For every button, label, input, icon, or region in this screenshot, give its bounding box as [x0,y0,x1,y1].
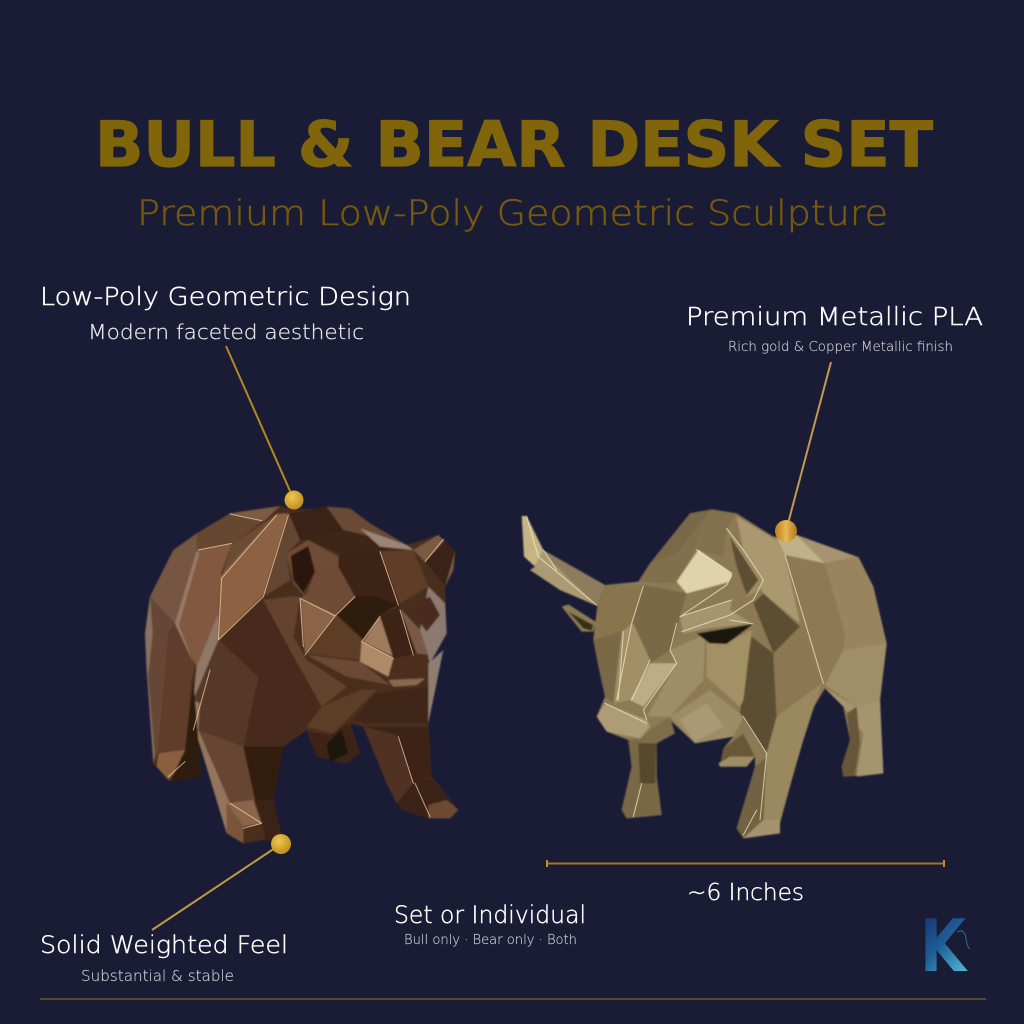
dimension bar [546,860,945,867]
subtitle: Premium Low-Poly Geometric Sculpture [137,194,888,234]
callout: solid weighted feel: Solid Weighted Feel [40,931,288,959]
logo: K [920,904,968,988]
callout: set or individual: Bull only · Bear only · Both [404,932,577,948]
callout: premium metallic PLA: Premium Metallic PLA [686,302,983,331]
callout: premium metallic PLA: Rich gold & Copper Metallic finish [728,340,953,355]
bear sculpture [145,506,458,843]
callout: low-poly design: Modern faceted aesthetic [88,320,364,344]
callout: low-poly design [40,282,411,344]
callout: solid weighted feel [40,931,288,985]
callout: premium metallic PLA [686,302,983,355]
callout: solid weighted feel: Substantial & stable [81,967,234,985]
dimension label: ~6 Inches [687,880,804,906]
callout: low-poly design: Low-Poly Geometric Design [40,282,411,311]
callout: set or individual [394,901,586,948]
callout line and dot: bull back [775,362,831,542]
title: BULL & BEAR DESK SET [95,108,933,181]
bull sculpture [522,509,887,838]
callout line and dot: bear foot [152,834,291,930]
callout line and dot: bear top [226,346,304,510]
callout: set or individual: Set or Individual [394,901,586,929]
